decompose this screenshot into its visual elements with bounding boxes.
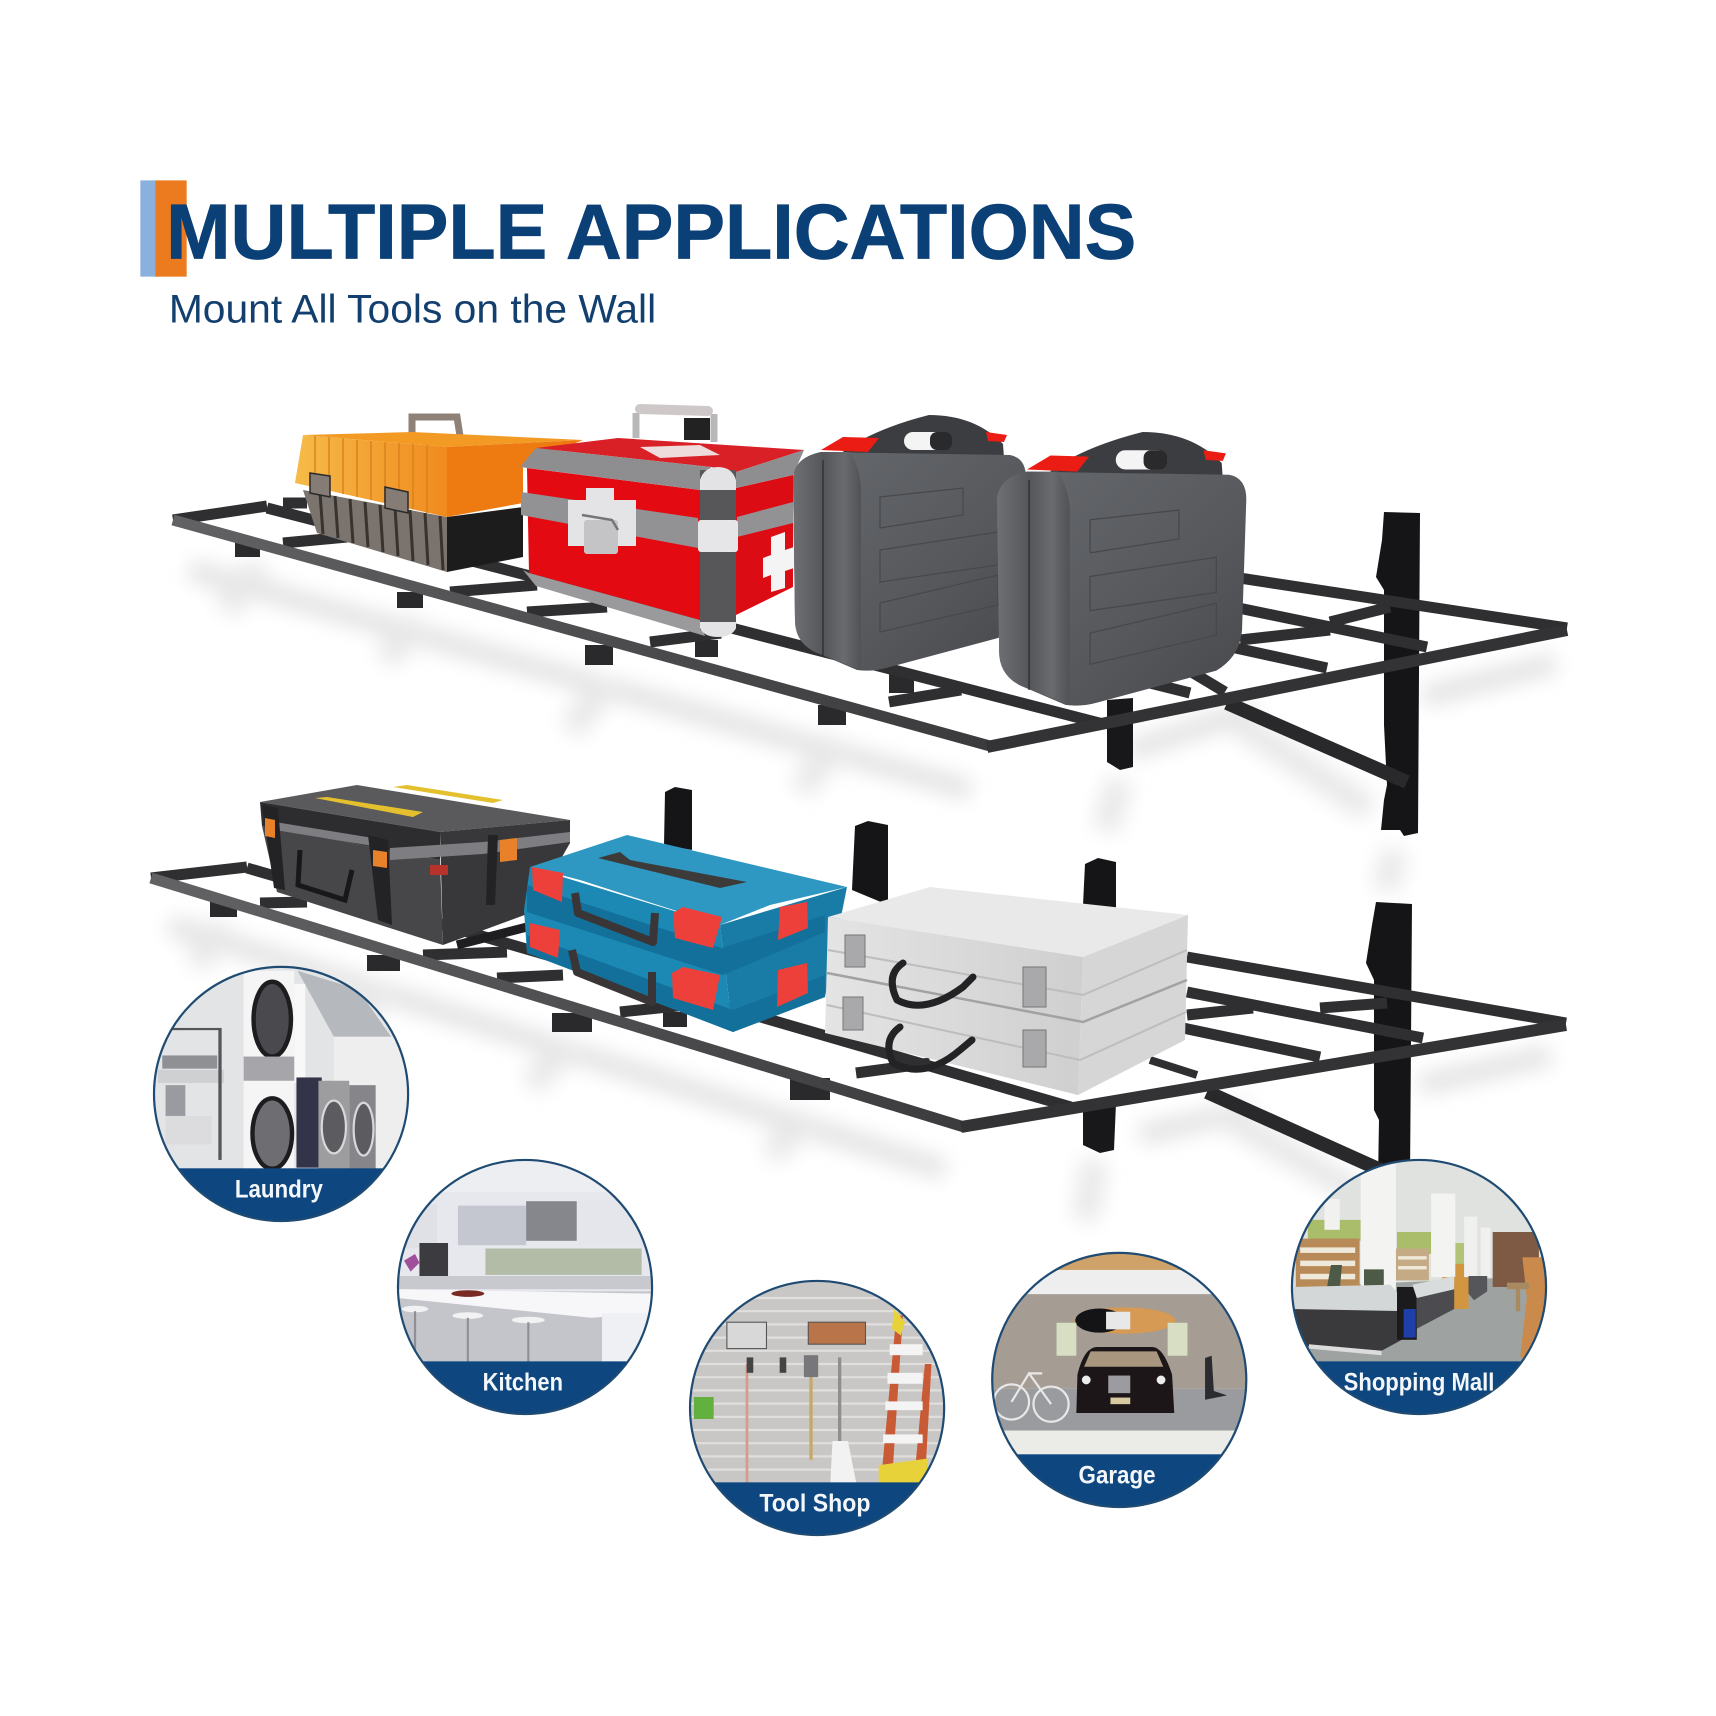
handles [889, 963, 973, 1069]
side panel [793, 452, 861, 670]
dark columns [262, 805, 498, 925]
scene [153, 966, 411, 1223]
bottom shelf rack [151, 787, 1566, 1180]
outer rails [173, 506, 1567, 628]
label: Kitchen [483, 1368, 563, 1396]
carry handles [572, 893, 655, 1002]
red blocks [530, 867, 808, 1010]
body [793, 452, 1026, 671]
handle [840, 415, 1004, 458]
orange clips [265, 818, 517, 868]
top face [828, 887, 1188, 957]
handle [298, 850, 352, 900]
circle: tool shop [689, 1280, 945, 1537]
silver aluminium cases [825, 887, 1188, 1095]
circle: garage [992, 1252, 1247, 1509]
rear support post [1083, 1103, 1116, 1153]
front face [527, 468, 700, 620]
outline [398, 1160, 652, 1414]
accent bars [140, 180, 187, 277]
wall bracket [1376, 512, 1420, 836]
outline [690, 1281, 944, 1535]
embossed panels [1090, 510, 1216, 664]
wall tabs [664, 787, 1116, 920]
outer rails [151, 867, 1566, 1023]
scene [992, 1252, 1247, 1509]
front face [825, 917, 1083, 1095]
support feet [210, 900, 830, 1100]
red latches [1027, 450, 1226, 472]
label: Laundry [235, 1175, 323, 1203]
yellow stripes [315, 785, 503, 817]
frame rails [173, 503, 1567, 747]
side face [440, 820, 570, 945]
top shelf shadow [190, 565, 1555, 890]
outline [154, 967, 408, 1221]
lower ribs [320, 493, 443, 570]
grey carrying case right [997, 432, 1246, 706]
top shelf rack [173, 503, 1567, 836]
top face [530, 835, 847, 925]
circle: shopping mall [1291, 1159, 1547, 1416]
handle [1047, 432, 1223, 478]
title block [140, 180, 1136, 331]
outline [1292, 1160, 1546, 1414]
band [521, 492, 698, 548]
inner rails and rungs [247, 868, 1423, 1107]
top face [260, 785, 570, 832]
inner rails and rungs [267, 503, 1427, 724]
top handle [598, 852, 747, 888]
front face [524, 867, 733, 1032]
diagonal brace [1227, 703, 1407, 782]
red latches [821, 432, 1007, 452]
blue stacked toolboxes [524, 835, 847, 1032]
red first aid case [520, 409, 804, 637]
rear support post [1107, 698, 1133, 770]
corner column [700, 470, 736, 630]
lid top [303, 432, 583, 447]
circle: laundry [153, 966, 411, 1223]
scene [1291, 1159, 1547, 1416]
lower body [303, 490, 447, 572]
label: Tool Shop [759, 1489, 870, 1517]
handle [684, 418, 710, 440]
side panel [997, 472, 1070, 705]
side face [736, 475, 793, 615]
front face [262, 826, 443, 945]
label: Garage [1079, 1461, 1156, 1489]
body [997, 472, 1246, 706]
lid front [295, 435, 447, 517]
front roller [457, 927, 527, 945]
diagonal brace [1207, 1092, 1385, 1172]
support feet [235, 540, 914, 725]
black protective case [260, 785, 570, 945]
scene [397, 1159, 653, 1416]
outline [992, 1253, 1246, 1507]
red light [430, 865, 448, 875]
side face [1078, 915, 1188, 1095]
latch [568, 488, 636, 554]
orange toolbox [295, 417, 583, 572]
grey carrying case left [793, 415, 1026, 671]
lid ribs [315, 436, 427, 513]
embossed panels [880, 488, 998, 632]
trim bands [275, 822, 570, 860]
subtitle: Mount All Tools on the Wall [169, 287, 656, 331]
white cross [763, 532, 794, 592]
circle: kitchen [397, 1159, 653, 1416]
lower shading [527, 885, 825, 1032]
handle [412, 417, 460, 436]
heading: MULTIPLE APPLICATIONS [166, 187, 1136, 275]
wall bracket [1366, 902, 1412, 1180]
top face [536, 438, 804, 472]
scene [689, 1280, 945, 1537]
side face [720, 887, 847, 1032]
lid side [447, 440, 583, 517]
front trims [520, 448, 711, 490]
latches [843, 935, 1046, 1067]
bottom shelf shadow [170, 925, 1550, 1220]
seams [827, 973, 1187, 1022]
label: Shopping Mall [1344, 1368, 1494, 1396]
frame rails [151, 867, 1566, 1127]
lid band [260, 802, 440, 860]
clasps [310, 473, 408, 513]
